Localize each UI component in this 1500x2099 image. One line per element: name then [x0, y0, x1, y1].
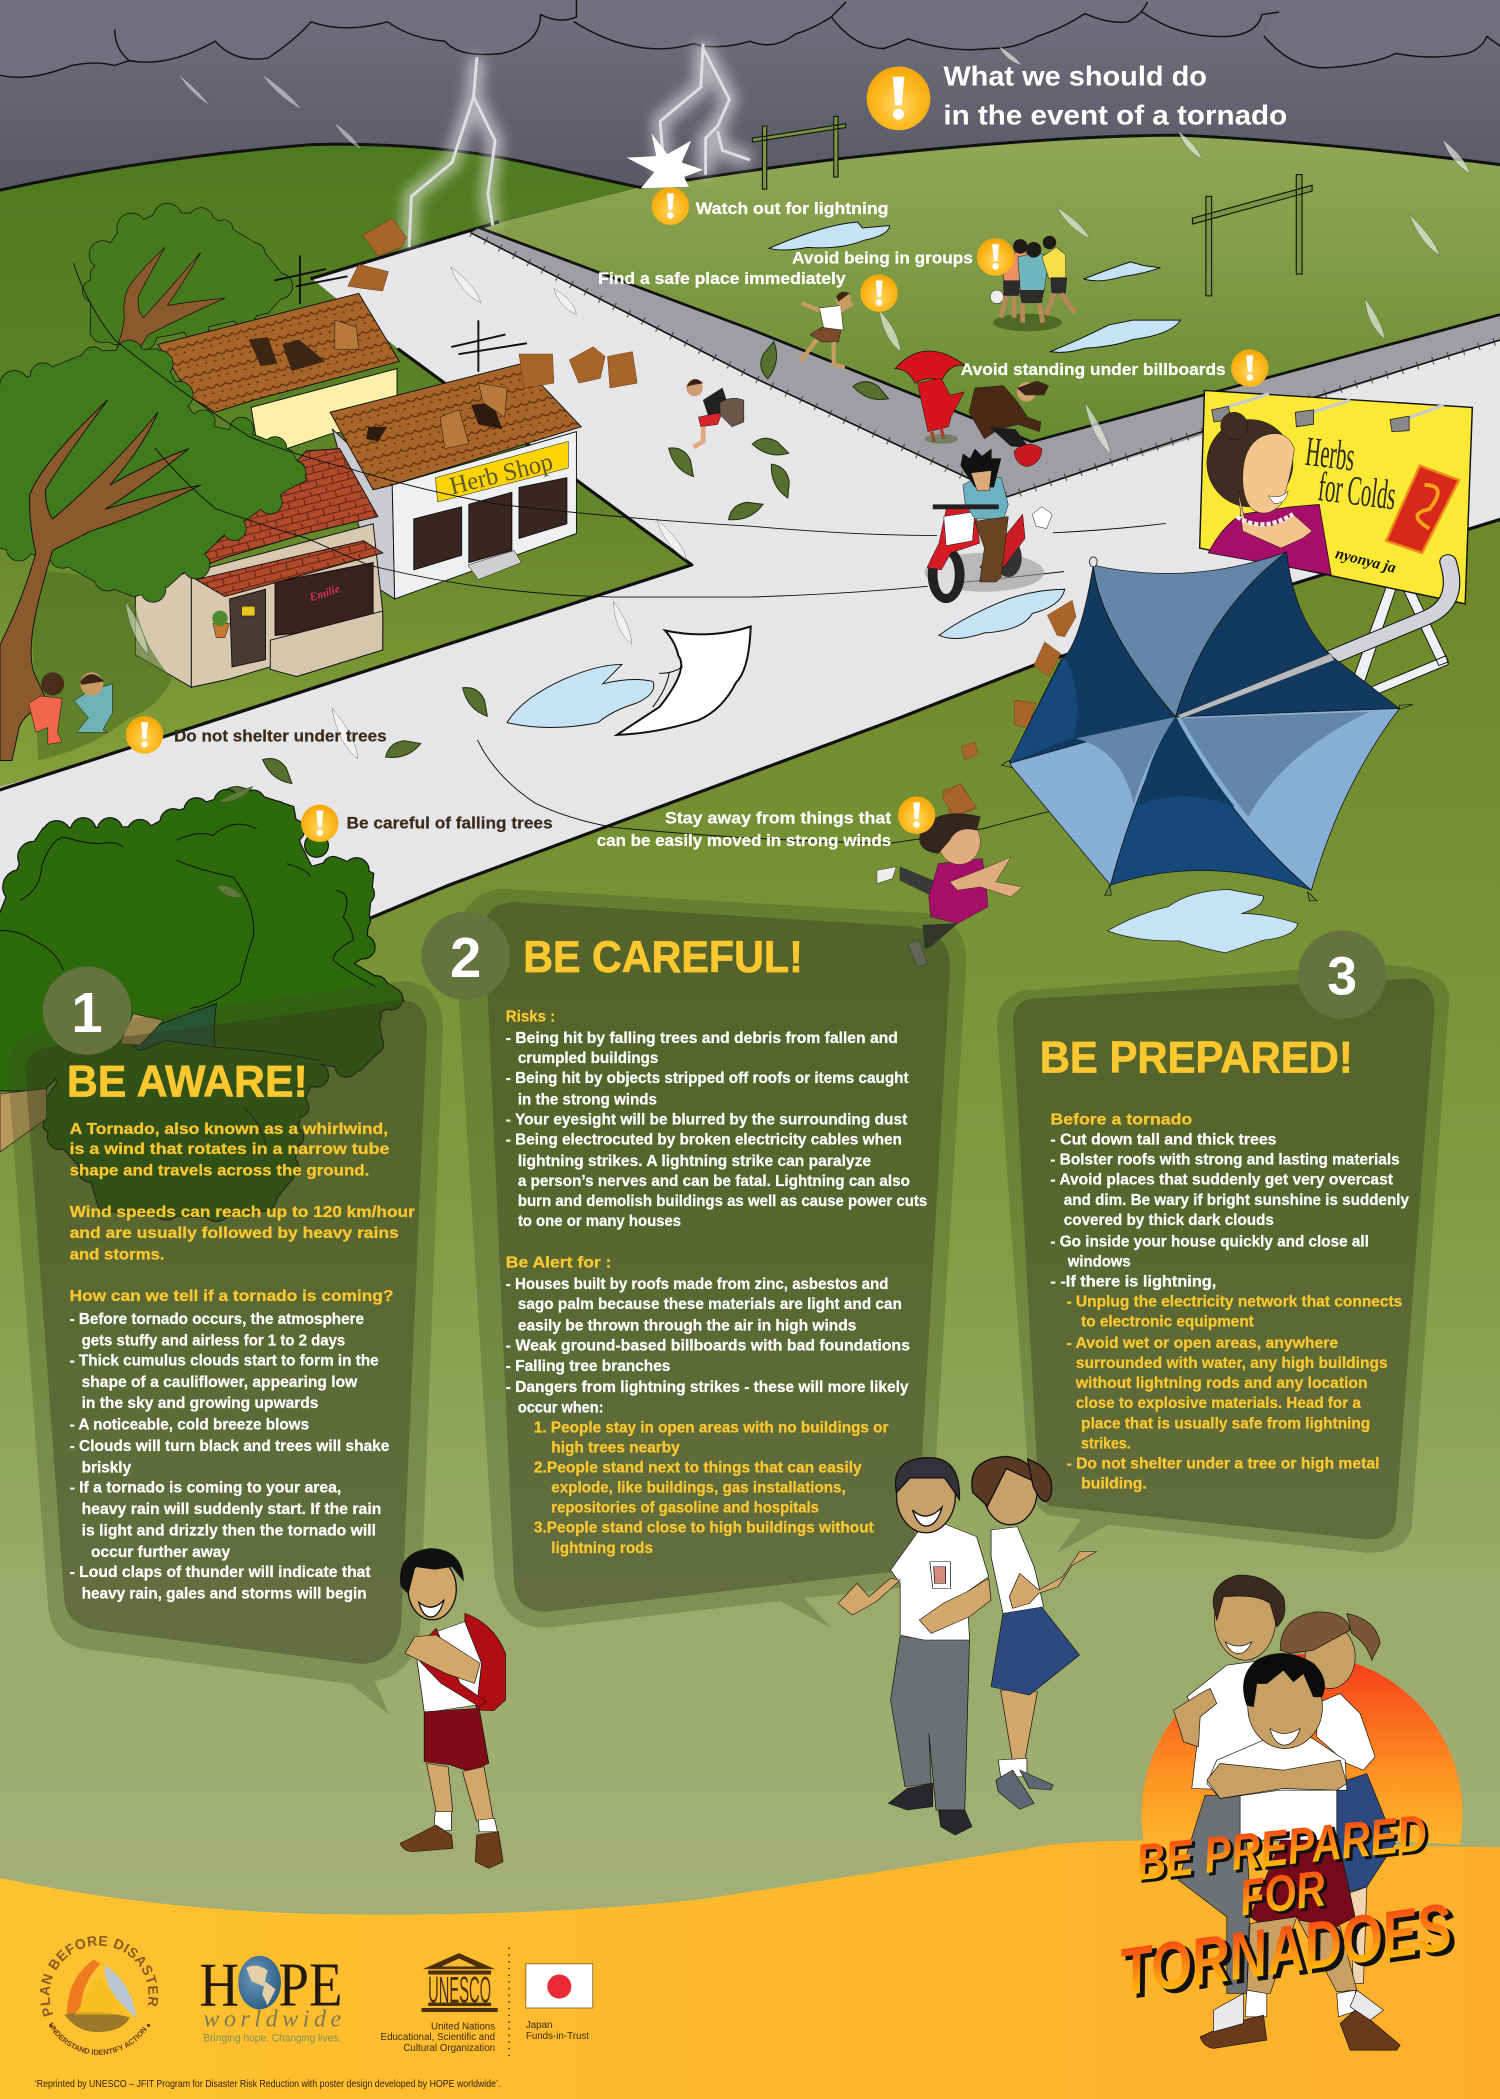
text: risks list: - Your eyesight will be blurred by the surrounding dust: [506, 1111, 908, 1128]
restaurant: [135, 449, 383, 687]
text: be alert list: Be Alert for :: [506, 1255, 612, 1272]
text: be alert list: 1. People stay in open areas with no buildings or: [534, 1419, 888, 1436]
text: be alert list: 2.People stand next to things that can easily: [534, 1460, 862, 1477]
billboard headline: for Colds: [1316, 463, 1398, 518]
text: before a tornado list: place that is usually safe from lightning: [1081, 1415, 1370, 1432]
right hill: [479, 135, 1500, 442]
text: risks list: Risks :: [506, 1008, 555, 1025]
text: risks list: [506, 1008, 927, 1230]
kerb: [471, 228, 1500, 497]
text: tornado definition: [70, 1121, 415, 1305]
text: before a tornado list: [1050, 1111, 1409, 1493]
text: before a tornado list: - Avoid wet or open areas, anywhere: [1066, 1335, 1338, 1352]
road: [0, 222, 1500, 964]
restaurant sign text: Emilie: [307, 582, 342, 605]
logo: plan before disaster: PLAN BEFORE DISASTER: [40, 1936, 158, 2017]
left hill: [0, 144, 692, 790]
person running on the road with a bag: [686, 379, 744, 447]
text: before a tornado list: strikes.: [1081, 1435, 1131, 1452]
poster title: be prepared for tornadoes: FOR: [1236, 1859, 1329, 1926]
telegraph poles: [752, 116, 1312, 296]
shop sign text: Herb Shop: [447, 448, 556, 501]
text: warning signs list: shape of a cauliflower, appearing low: [82, 1374, 358, 1391]
heading: what we should do: What we should do: [943, 61, 1207, 92]
logo: plan before disaster: UNDERSTAND IDENTIFY ACTION: [49, 2022, 147, 2055]
logo: hope worldwide: Bringing hope. Changing lives.: [203, 2032, 341, 2044]
callouts: safety advice on the scene: Find a safe place immediately: [598, 269, 846, 288]
alert icon: shelter under trees: [126, 716, 163, 754]
logo: hope worldwide: [199, 1949, 343, 2044]
logo: japan funds-in-trust: Japan: [526, 2020, 552, 2031]
logo: plan before disaster: [40, 1936, 158, 2055]
text: before a tornado list: - Avoid places that suddenly get very overcast: [1050, 1172, 1394, 1189]
text: warning signs list: occur further away: [91, 1544, 230, 1561]
group of children: [990, 236, 1075, 331]
blown-inside-out umbrella: [1001, 552, 1452, 901]
tree behind the houses: [83, 204, 292, 364]
puddles on the field and road: [507, 222, 1298, 953]
text: warning signs list: gets stuffy and airless for 1 to 2 days: [82, 1332, 345, 1349]
text: be alert list: easily be thrown through the air in high winds: [518, 1318, 857, 1335]
poster title: be prepared for tornadoes: BE PREPARED: [1136, 1806, 1432, 1893]
text: warning signs list: is light and drizzly then the tornado will: [82, 1522, 376, 1539]
herb shop: [330, 321, 637, 599]
text: be alert list: repositories of gasoline and hospitals: [551, 1500, 819, 1517]
text: before a tornado list: - Do not shelter under a tree or high metal: [1066, 1455, 1380, 1472]
number badge 1: [43, 967, 131, 1055]
boy with red backpack: [400, 1549, 506, 1868]
trio of children with setting sun: [1142, 1575, 1463, 2050]
text: risks list: - Being electrocuted by broken electricity cables when: [506, 1132, 902, 1149]
power cables: [74, 264, 1165, 843]
sheltering children: [29, 672, 112, 744]
text: risks list: a person’s nerves and can be fatal. Lightning can also: [518, 1173, 910, 1190]
text: tornado definition: shape and travels across the ground.: [70, 1162, 369, 1179]
lightning bolts: [409, 44, 750, 247]
alert icons: [652, 67, 1269, 387]
logo: unesco: Educational, Scientific and: [381, 2032, 495, 2043]
text: warning signs list: heavy rain will suddenly start. If the rain: [82, 1501, 381, 1518]
text: risks list: to one or many houses: [518, 1213, 681, 1230]
text: before a tornado list: building.: [1081, 1476, 1147, 1493]
text: be alert list: - Weak ground-based billboards with bad foundations: [506, 1338, 910, 1355]
text: before a tornado list: windows: [1067, 1253, 1131, 1270]
rain streaks: [125, 74, 686, 759]
text: before a tornado list: - Unplug the electricity network that connects: [1066, 1294, 1403, 1311]
lady in red with umbrella: [895, 351, 966, 444]
text: risks list: lightning strikes. A lightning strike can paralyze: [518, 1153, 871, 1170]
text: be alert list: sago palm because these materials are light and can: [518, 1296, 902, 1313]
heading: be aware: BE AWARE!: [67, 1057, 308, 1106]
text: before a tornado list: Before a tornado: [1050, 1111, 1193, 1128]
logo: japan funds-in-trust: [526, 1964, 593, 2042]
dotted divider: [508, 1948, 510, 2062]
text: warning signs list: in the sky and growing upwards: [82, 1395, 319, 1412]
text: before a tornado list: and dim. Be wary if bright sunshine is suddenly: [1064, 1192, 1409, 1209]
text: be alert list: explode, like buildings, gas installations,: [551, 1480, 846, 1497]
poster title: be prepared for tornadoes: [1115, 1804, 1461, 2014]
panel 2: be careful: [421, 889, 966, 1628]
logo: hope worldwide: HOPE: [199, 1949, 343, 2019]
text: tornado definition: Wind speeds can reach up to 120 km/hour: [70, 1204, 415, 1221]
back house: [158, 256, 399, 449]
text: tornado definition: and storms.: [70, 1247, 165, 1264]
text: be alert list: lightning rods: [551, 1540, 653, 1557]
text: be alert list: [506, 1255, 910, 1557]
flying leaves: [215, 341, 891, 807]
text: warning signs list: - Thick cumulus clouds start to form in the: [70, 1352, 379, 1369]
billboard: [1200, 390, 1472, 697]
heading: be prepared: BE PREPARED!: [1040, 1033, 1353, 1082]
callouts: safety advice on the scene: Watch out for lightning: [696, 199, 888, 218]
schoolboy and schoolgirl presenting: [838, 1456, 1096, 1835]
footer band: [0, 1840, 1500, 2099]
text: before a tornado list: - Go inside your house quickly and close all: [1050, 1233, 1369, 1250]
alert icon: things moved by wind: [898, 796, 935, 834]
billboard headline: Herbs: [1303, 428, 1357, 480]
foreground tree: [0, 786, 403, 1221]
big tree sheltering people: [0, 340, 306, 760]
callouts: safety advice on the scene: can be easily moved in strong winds: [597, 831, 891, 850]
text: risks list: - Being hit by objects stripped off roofs or items caught: [506, 1070, 909, 1087]
text: before a tornado list: covered by thick dark clouds: [1064, 1212, 1274, 1229]
running woman with shingle: [877, 784, 1022, 967]
person shouting to find a safe place: [800, 291, 853, 368]
number badge 3: 3: [1327, 948, 1357, 1007]
number badge 1: 1: [71, 981, 103, 1044]
callouts: safety advice on the scene: Stay away from things that: [665, 808, 892, 827]
text: risks list: in the strong winds: [518, 1091, 657, 1108]
text: warning signs list: - Before tornado occurs, the atmosphere: [70, 1311, 364, 1328]
panel 1: be aware: [8, 967, 443, 1715]
logo: unesco: [381, 1953, 498, 2054]
text: be alert list: high trees nearby: [551, 1439, 680, 1456]
callouts: safety advice on the scene: Avoid being in groups: [792, 249, 973, 268]
callouts: safety advice on the scene: Be careful of falling trees: [347, 814, 553, 833]
text: before a tornado list: to electronic equipment: [1081, 1314, 1254, 1331]
text: before a tornado list: - Bolster roofs with strong and lasting materials: [1050, 1152, 1400, 1169]
text: before a tornado list: - -If there is lightning,: [1050, 1273, 1216, 1290]
flying paper: [617, 626, 751, 735]
motorbike rider: [925, 449, 1052, 603]
shingles blown in the wind: [348, 218, 1076, 817]
callouts: safety advice on the scene: Avoid standing under billboards: [961, 360, 1226, 379]
text: tornado definition: A Tornado, also known as a whirlwind,: [70, 1121, 388, 1138]
number badge 3: [1298, 930, 1386, 1019]
panel 3: be prepared: [997, 930, 1449, 1553]
text: before a tornado list: surrounded with water, any high buildings: [1076, 1355, 1388, 1372]
text: be alert list: 3.People stand close to high buildings without: [534, 1520, 874, 1537]
logo: hope worldwide: worldwide: [203, 2007, 342, 2033]
text: warning signs list: briskly: [82, 1460, 131, 1477]
text: warning signs list: - If a tornado is coming to your area,: [70, 1480, 341, 1497]
text: be alert list: - Houses built by roofs made from zinc, asbestos and: [506, 1276, 888, 1293]
text: before a tornado list: without lightning rods and any location: [1075, 1375, 1368, 1392]
text: warning signs list: heavy rain, gales and storms will begin: [82, 1585, 367, 1602]
billboard brand: nyonya ja: [1334, 545, 1398, 577]
logo: japan funds-in-trust: Funds-in-Trust: [526, 2031, 589, 2042]
callouts: safety advice on the scene: Do not shelter under trees: [174, 727, 387, 746]
text: warning signs list: [70, 1311, 390, 1602]
logo: unesco: United Nations: [431, 2021, 495, 2032]
heading: what we should do: [943, 61, 1287, 130]
poster title: be prepared for tornadoes: FOR: [1239, 1862, 1332, 1929]
text: warning signs list: - Clouds will turn black and trees will shake: [70, 1438, 390, 1455]
text: tornado definition: is a wind that rotates in a narrow tube: [70, 1141, 390, 1158]
callouts: safety advice on the scene: [174, 199, 1226, 850]
text: risks list: crumpled buildings: [518, 1050, 659, 1067]
text: tornado definition: and are usually followed by heavy rains: [70, 1225, 399, 1242]
heading: be careful: BE CAREFUL!: [523, 933, 803, 982]
text: be alert list: occur when:: [518, 1399, 603, 1416]
logo: unesco: Cultural Organization: [403, 2043, 495, 2054]
heading: what we should do: in the event of a tornado: [943, 99, 1287, 130]
text: be alert list: - Falling tree branches: [506, 1358, 671, 1375]
text: warning signs list: - Loud claps of thunder will indicate that: [70, 1564, 371, 1581]
storm clouds: [0, 0, 1500, 77]
background: sky: [0, 0, 1500, 455]
man in brown coat: [969, 381, 1049, 467]
poster title: be prepared for tornadoes: BE PREPARED: [1133, 1804, 1429, 1891]
text: tornado definition: How can we tell if a tornado is coming?: [70, 1288, 393, 1305]
number badge 2: 2: [450, 926, 481, 989]
text: before a tornado list: close to explosive materials. Head for a: [1076, 1395, 1361, 1412]
text: be alert list: - Dangers from lightning strikes - these will more likely: [506, 1379, 909, 1396]
text: warning signs list: - A noticeable, cold breeze blows: [70, 1417, 309, 1434]
text: UNESCO: [428, 1969, 491, 2011]
number badge 2: [421, 912, 510, 1000]
alert icon: falling trees: [301, 805, 339, 842]
text: before a tornado list: - Cut down tall and thick trees: [1050, 1132, 1277, 1149]
text: risks list: burn and demolish buildings as well as cause power cuts: [518, 1193, 927, 1210]
text: risks list: - Being hit by falling trees and debris from fallen and: [506, 1030, 898, 1047]
credit line: ‘Reprinted by UNESCO – JFIT Program for Disaster Risk Reduction with poster design developed by HOPE worldwide’.: [35, 2079, 500, 2090]
billboard headline: [1299, 428, 1402, 518]
